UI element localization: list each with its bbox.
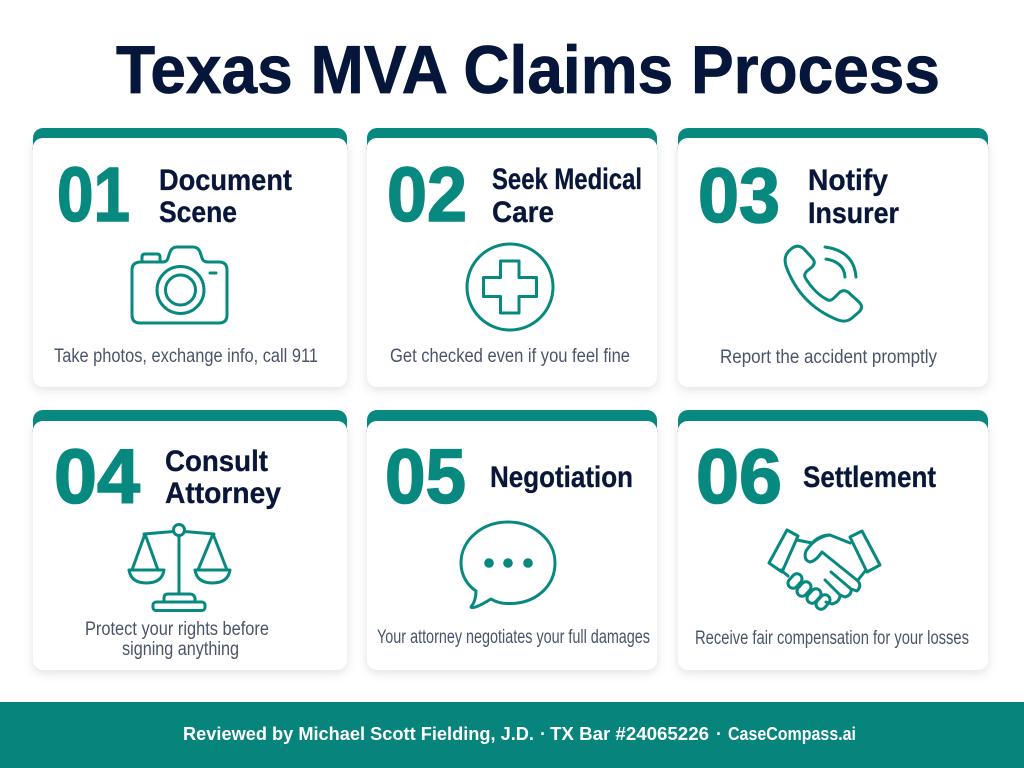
heading: notify insurer: Notify: [808, 164, 888, 197]
panel: step 06 settlement: [678, 410, 988, 670]
description: signing anything: [122, 639, 239, 660]
description: Get checked even if you feel fine: [390, 346, 630, 367]
panel: step 04 consult attorney: [33, 410, 347, 670]
footer credit text: Reviewed by Michael Scott Fielding, J.D.: [183, 724, 534, 744]
heading: document scene: Scene: [159, 196, 237, 229]
heading: document scene: [159, 164, 292, 229]
panel: step 05 negotiation: [367, 410, 657, 670]
heading: notify insurer: [808, 164, 899, 230]
heading: notify insurer: Insurer: [808, 197, 899, 230]
panel: step 02 seek medical care: [367, 128, 657, 387]
icon: camera: [132, 247, 227, 323]
footer band: [0, 702, 1024, 768]
footer credit text: ·: [716, 724, 722, 744]
panel: step 01 document scene: [33, 128, 347, 387]
step number 01: 01: [57, 152, 130, 238]
step number 02: 02: [387, 152, 467, 238]
footer credit text: TX Bar #24065226: [550, 724, 709, 744]
heading: document scene: Document: [159, 164, 292, 197]
description: Protect your rights before: [85, 619, 269, 640]
description: Your attorney negotiates your full damages: [377, 627, 650, 648]
footer credit text: ·: [540, 724, 546, 744]
title: Texas MVA Claims Process: [116, 32, 940, 108]
footer credit text: CaseCompass.ai: [728, 724, 856, 744]
step number 03: 03: [698, 153, 780, 239]
heading: seek medical care: Seek Medical: [492, 163, 642, 196]
heading: settlement: Settlement: [803, 461, 936, 494]
description: Report the accident promptly: [720, 347, 937, 368]
footer credit text: [183, 724, 856, 744]
panel: step 03 notify insurer: [678, 128, 988, 387]
heading: consult attorney: Attorney: [165, 477, 281, 510]
icon: telephone: [785, 246, 862, 321]
description: [85, 619, 269, 660]
heading: seek medical care: Care: [492, 196, 554, 229]
step number 05: 05: [385, 434, 466, 520]
icon: scales of justice: [129, 524, 230, 610]
step number 04: 04: [54, 434, 140, 520]
icon: handshake: [769, 530, 880, 611]
heading: negotiation: Negotiation: [490, 461, 633, 494]
icon: medical cross: [467, 244, 553, 330]
heading: consult attorney: Consult: [165, 445, 268, 478]
heading: consult attorney: [165, 445, 281, 510]
heading: seek medical care: [492, 163, 642, 229]
step number 06: 06: [696, 434, 782, 520]
description: Take photos, exchange info, call 911: [54, 346, 318, 367]
icon: speech bubble: [461, 522, 555, 608]
